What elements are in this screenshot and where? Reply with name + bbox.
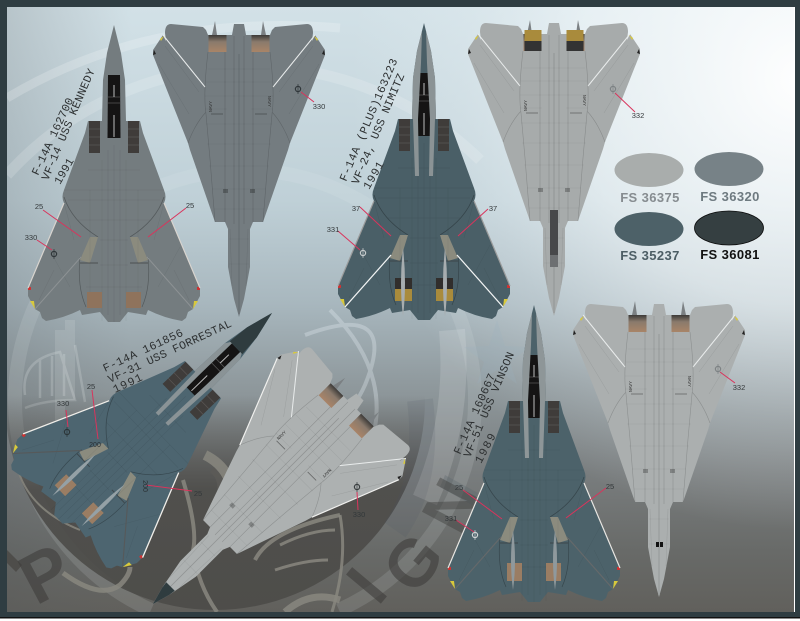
title: Nimitz: 1991 <box>362 160 388 192</box>
swatch: FS 35237: FS 35237 <box>620 248 680 263</box>
callout numbers <box>25 102 745 523</box>
callout numbers: 330 <box>313 102 325 111</box>
title: Nimitz: F-14A (PLUS)163223 <box>339 57 401 184</box>
aircraft: F-14A 162700 lower surface <box>153 21 325 317</box>
title: Forrestal: F-14A 161856 <box>102 328 186 376</box>
callout numbers: 25 <box>35 202 43 211</box>
callout numbers: 25 <box>194 489 202 498</box>
callout numbers: 25 <box>606 482 614 491</box>
title: Kennedy: VF-14 USS KENNEDY <box>41 67 99 183</box>
callout numbers: 331 <box>327 225 339 234</box>
emblem lettering: G <box>368 519 458 606</box>
emblem lettering: N <box>407 467 495 544</box>
callout lines <box>37 92 735 532</box>
callout numbers: 332 <box>632 111 644 120</box>
swatch: FS 36320: FS 36320 <box>700 189 760 204</box>
swatch: FS 36375: FS 36375 <box>620 190 680 205</box>
swatch: FS 36375 <box>614 153 684 205</box>
swatch: FS 36081: FS 36081 <box>700 247 760 262</box>
swatch: FS 35237 <box>614 212 684 263</box>
title: Vinson: VF-51 USS VINSON <box>463 351 518 460</box>
aircraft: F-14A 162700 upper surface <box>28 25 200 322</box>
title: Vinson: F-14A 160667 <box>453 372 499 457</box>
callout numbers: 25 <box>87 382 95 391</box>
callout numbers: 25 <box>455 483 463 492</box>
callout numbers: 37 <box>352 204 360 213</box>
titles <box>31 57 518 466</box>
title: Kennedy: F-14A 162700 <box>31 96 77 178</box>
aircraft: F-14A 161856 upper surface <box>0 251 332 581</box>
title: Forrestal: 1991 <box>112 373 145 397</box>
swatch: FS 36081 <box>694 211 764 262</box>
title: Kennedy: 1991 <box>53 157 78 187</box>
callout numbers: 330 <box>25 233 37 242</box>
colour swatches <box>614 152 764 263</box>
callout numbers: 200 <box>89 442 101 449</box>
emblem light swirls on dark disk <box>18 455 343 612</box>
roundels <box>51 84 721 540</box>
callout numbers: 330 <box>353 510 365 519</box>
callout numbers: 200 <box>141 480 148 492</box>
markings and callouts <box>25 84 745 540</box>
title: Nimitz: VF-24, USS NIMITZ <box>351 72 408 187</box>
title: Vinson: 1989 <box>474 432 500 466</box>
emblem dark disk <box>7 403 424 610</box>
emblem lettering: P <box>6 528 84 619</box>
aircraft: F-14A 160667 upper surface <box>448 305 620 602</box>
aircraft: F-14A 160667 lower surface <box>573 301 745 597</box>
callout numbers: 37 <box>489 204 497 213</box>
aircraft: F-14A 161856 lower surface <box>92 334 423 621</box>
callout numbers: 25 <box>186 201 194 210</box>
aircraft: F-14A 163223 lower surface <box>468 20 640 316</box>
emblem watermark <box>7 25 480 610</box>
callout numbers: 331 <box>445 514 457 523</box>
emblem lettering: I <box>332 554 401 616</box>
callout numbers: 332 <box>733 383 745 392</box>
swatch: FS 36320 <box>694 152 764 204</box>
aircraft: F-14A 163223 upper surface <box>338 23 510 320</box>
title: Forrestal: VF-31 USS FORRESTAL <box>107 319 234 387</box>
emblem lettering <box>18 478 477 604</box>
callout numbers: 330 <box>57 399 69 408</box>
